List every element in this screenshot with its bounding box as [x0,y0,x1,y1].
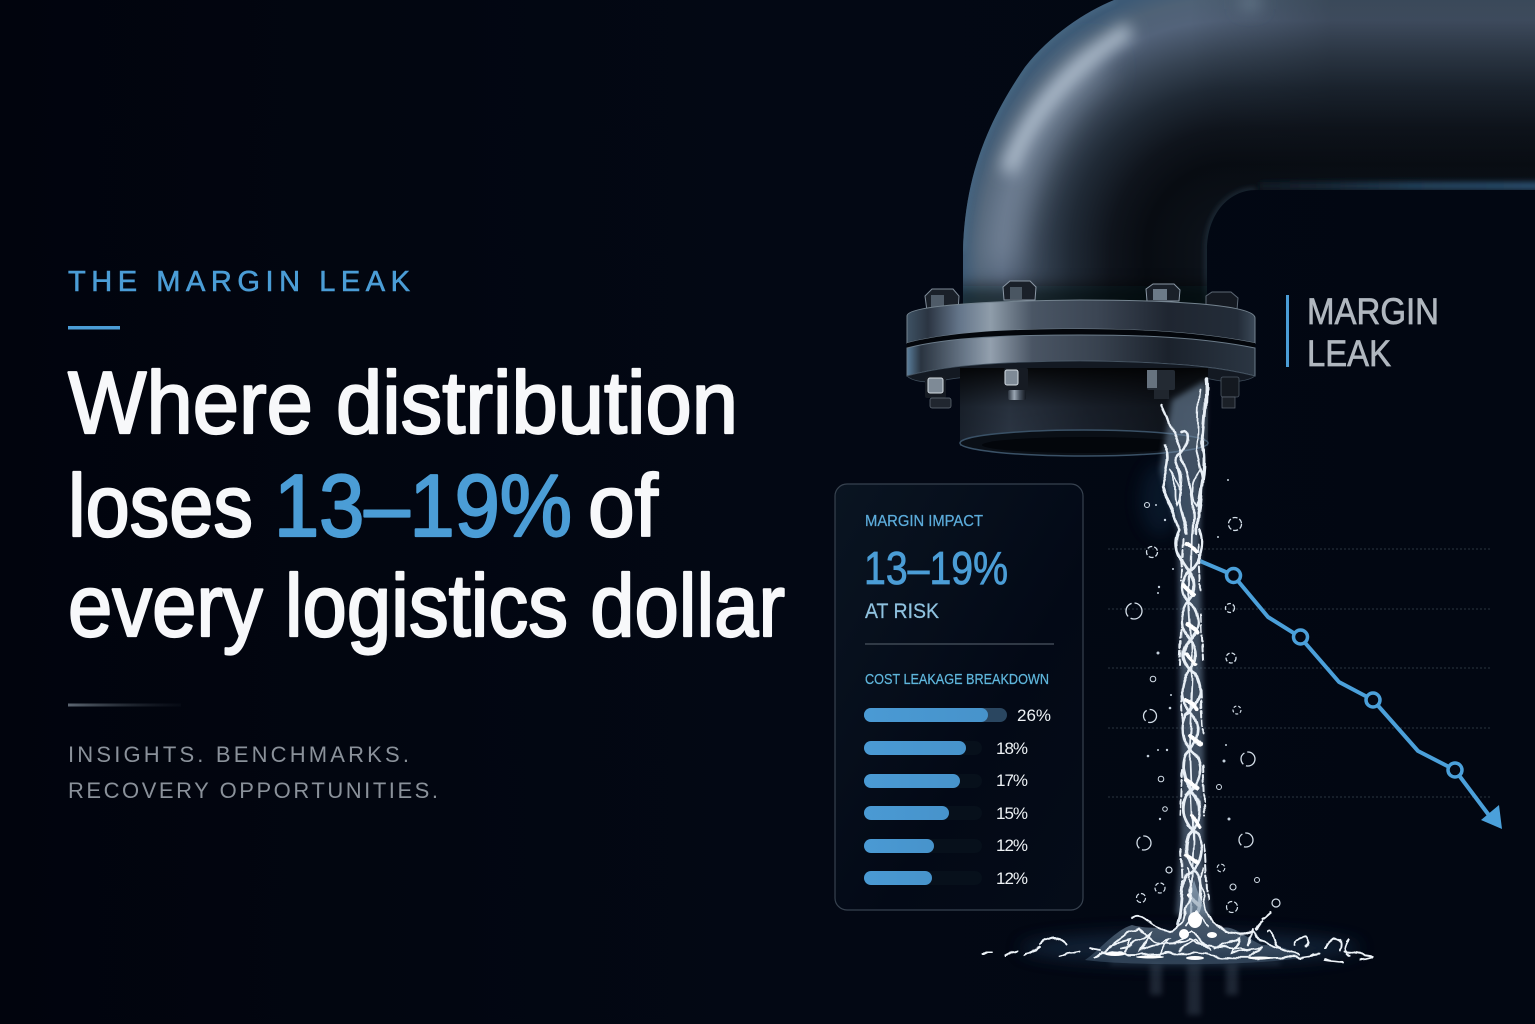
bar chart: cost leakage breakdown [864,706,1051,888]
subtitle: INSIGHTS. BENCHMARKS. [68,742,409,767]
bar chart: cost leakage breakdown: 18% [996,739,1028,758]
water splash [982,868,1372,1015]
chart arrowhead [1481,805,1502,829]
subtitle: RECOVERY OPPORTUNITIES. [68,778,438,803]
headline [68,353,785,655]
headline: of [588,456,659,555]
margin impact card [835,484,1083,910]
bar chart: cost leakage breakdown: 17% [996,771,1028,790]
headline: 13–19% [274,456,572,555]
top bolts [925,281,1238,311]
eyebrow: the margin leak: THE MARGIN LEAK [68,266,411,298]
subtitle [68,742,438,803]
chart markers [1226,568,1462,777]
headline: loses [68,456,253,555]
bar chart: cost leakage breakdown: 26% [1017,706,1051,725]
bar chart: cost leakage breakdown: 12% [996,836,1028,855]
card subheading: cost leakage breakdown: COST LEAKAGE BREAKDOWN [865,671,1049,688]
margin leak side label [1286,291,1439,374]
card label: margin impact: MARGIN IMPACT [865,513,983,530]
headline: every logistics dollar [68,556,785,655]
water stream [1140,380,1210,925]
pipe flange [907,281,1255,456]
card stat caption: at risk: AT RISK [865,600,939,623]
lower flange plate [907,335,1255,376]
pipe elbow [963,0,1535,304]
margin leak side label: LEAK [1307,333,1391,374]
margin leak side label: MARGIN [1307,291,1439,332]
eyebrow accent rule [68,326,120,330]
water droplets [1126,479,1280,912]
bottom nuts [925,368,1239,408]
splash reflection [1110,961,1280,1015]
declining margin line chart [1108,549,1502,829]
bar chart: cost leakage breakdown: 15% [996,804,1028,823]
card stat: 13–19%: 13–19% [864,542,1008,594]
upper flange plate [907,300,1255,343]
headline: Where distribution [68,353,738,452]
headline divider [68,704,181,706]
lower pipe collar [960,368,1208,456]
bar chart: cost leakage breakdown: 12% [996,869,1028,888]
